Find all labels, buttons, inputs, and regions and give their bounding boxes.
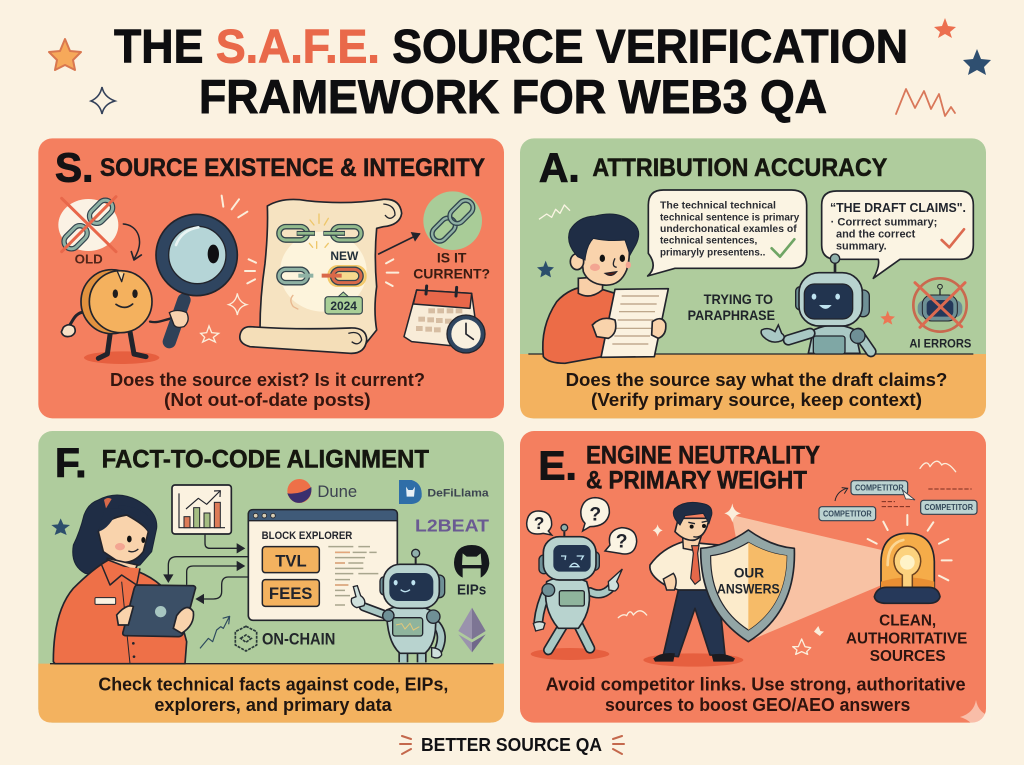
- icon: man with shield: [643, 502, 743, 667]
- caption: S: [110, 369, 425, 410]
- icon: calendar and clock: [404, 286, 485, 353]
- icons: question bubbles: ?: [534, 513, 544, 533]
- heading: E: ENGINE NEUTRALITY: [586, 441, 820, 469]
- heading: E: E.: [538, 442, 577, 488]
- speech bubble: draft claims: summary.: [836, 240, 887, 252]
- caption: E: Avoid competitor links. Use strong, authoritative: [546, 673, 966, 694]
- label: is it current: [413, 250, 490, 282]
- icon: magnifying glass: [156, 214, 237, 342]
- icon: trend scribble: [200, 616, 230, 648]
- icon: person reading: [543, 214, 668, 363]
- label: on-chain: [235, 626, 335, 651]
- label: trying to paraphrase: [688, 292, 775, 323]
- heading: A: [539, 145, 887, 191]
- decorative: scribble and star: [537, 205, 570, 277]
- caption: E: [546, 673, 966, 715]
- label: is it current: CURRENT?: [413, 266, 490, 282]
- arrow: scroll to current: [379, 232, 421, 254]
- caption banner: A: [520, 354, 986, 418]
- icon: block explorer window: TVL: [275, 551, 307, 570]
- icon: orange star: [49, 39, 81, 70]
- icon: shield: OUR: [734, 566, 764, 581]
- speech bubble: technical sentence: The technical technical: [660, 201, 776, 212]
- label: clean authoritative sources: AUTHORITATIVE: [846, 630, 967, 647]
- footer label: BETTER SOURCE QA: [421, 735, 602, 755]
- heading: A: ATTRIBUTION ACCURACY: [592, 154, 887, 182]
- icon: shield: [701, 530, 794, 642]
- icon: Dune logo: Dune: [317, 482, 357, 501]
- icons: question bubbles: ?: [616, 532, 628, 553]
- icon: old broken link: [58, 197, 118, 266]
- caption: E: sources to boost GEO/AEO answers: [605, 694, 910, 715]
- caption banner: A: Does the source say what the draft claims?: [566, 369, 947, 390]
- panel: S source existence: [38, 138, 504, 418]
- arrow: old to coin: [123, 224, 141, 260]
- icon: robot: [761, 254, 871, 354]
- icon: AI errors: AI ERRORS: [909, 336, 971, 350]
- panel: E engine neutrality: [520, 431, 986, 723]
- icons: question bubbles: [527, 498, 637, 554]
- speech bubble: draft claims: “THE DRAFT CLAIMS".: [830, 200, 966, 215]
- decorative sparks: magnifier: [201, 196, 256, 342]
- icons: competitor tags: COMPETITOR: [924, 503, 973, 512]
- icon: Dune logo: [287, 479, 357, 503]
- icon: block explorer window: FEES: [269, 584, 312, 603]
- decorative: coral star: [880, 311, 895, 325]
- heading: E: & PRIMARY WEIGHT: [586, 466, 807, 494]
- icons: competitor tags: [819, 481, 977, 521]
- icon: corner sparkle: [960, 700, 992, 734]
- icon: GitHub EIPs: EIPs: [457, 583, 486, 599]
- icon: shield: ANSWERS: [717, 581, 780, 596]
- icon: chart card: [172, 485, 231, 534]
- icon: parchment scroll: NEW: [330, 249, 359, 263]
- decorative: navy star: [51, 518, 70, 535]
- heading: S: [55, 145, 485, 191]
- icon: coral star: [934, 18, 956, 38]
- icons: competitor tags: COMPETITOR: [823, 509, 872, 518]
- icon: old broken link: OLD: [75, 251, 103, 266]
- speech bubble: technical sentence: [648, 190, 807, 276]
- label: clean authoritative sources: CLEAN,: [879, 612, 936, 629]
- panel: A attribution accuracy: [520, 138, 986, 418]
- label: is it current: IS IT: [437, 250, 467, 266]
- heading: F: FACT-TO-CODE ALIGNMENT: [102, 446, 429, 474]
- caption banner: F: explorers, and primary data: [154, 694, 392, 715]
- heading: S: SOURCE EXISTENCE & INTEGRITY: [100, 154, 485, 182]
- icon: Ethereum diamond: [458, 608, 486, 652]
- caption: S: (Not out-of-date posts): [164, 389, 371, 410]
- icon: L2BEAT logo: L2BEAT: [415, 516, 489, 536]
- caption: S: Does the source exist? Is it current?: [110, 369, 425, 390]
- icon: parchment scroll: [240, 199, 402, 353]
- heading: F: F.: [55, 440, 87, 486]
- speech bubble: technical sentence: underchonatical examles of: [660, 224, 797, 235]
- decorative sparks: scroll: [386, 259, 398, 286]
- speech bubble: draft claims: · Corrrect summary;: [831, 217, 937, 229]
- speech bubble: draft claims: [822, 191, 973, 278]
- icon: woman with tablet: [53, 495, 196, 664]
- icons: question bubbles: ?: [589, 505, 601, 526]
- panel: F fact-to-code alignment: [38, 431, 504, 723]
- speech bubble: technical sentence: technical sentence is primary: [660, 212, 800, 223]
- caption banner: F: Check technical facts against code, EIPs,: [98, 673, 448, 694]
- label: clean authoritative sources: SOURCES: [870, 648, 946, 665]
- title: FRAMEWORK FOR WEB3 QA: [199, 70, 827, 123]
- heading: S: S.: [55, 145, 93, 191]
- speech bubble: technical sentence: primaryly presentens..: [660, 247, 765, 258]
- icon: robot pointing: [351, 549, 445, 662]
- icon: block explorer window: BLOCK EXPLORER: [262, 530, 352, 542]
- icon: AI errors: [909, 278, 971, 350]
- arrows: flows between chart, explorer and tablet: [164, 535, 248, 603]
- title: [114, 20, 908, 123]
- label: trying to paraphrase: PARAPHRASE: [688, 308, 775, 323]
- caption banner: F: [38, 664, 504, 723]
- icon: GitHub EIPs: [454, 545, 489, 599]
- heading: F: [55, 440, 429, 486]
- icon: outline sparkle: [91, 87, 115, 114]
- decorative: squiggles and stars: [618, 461, 956, 654]
- icon: parchment scroll: 2024: [330, 299, 357, 313]
- icon: coin character: [61, 270, 172, 364]
- heading: A: A.: [539, 145, 580, 191]
- icon: navy star: [963, 49, 991, 75]
- caption banner: A: (Verify primary source, keep context): [591, 389, 922, 410]
- icon: DefiLlama logo: DeFiLlama: [427, 487, 490, 499]
- speech bubble: draft claims: and the correct: [836, 229, 916, 241]
- icon: confused robot: [531, 524, 622, 660]
- label: on-chain: ON-CHAIN: [262, 629, 335, 648]
- icon: zigzag scribble: [896, 89, 955, 116]
- icon: DefiLlama logo: [399, 480, 490, 504]
- heading: E: [538, 441, 820, 494]
- label: trying to paraphrase: TRYING TO: [704, 292, 773, 307]
- title: THE S.A.F.E. SOURCE VERIFICATION: [114, 20, 908, 72]
- speech bubble: technical sentence: technical sentences,: [660, 236, 757, 247]
- icons: competitor tags: COMPETITOR: [855, 483, 904, 492]
- light beam: [732, 515, 882, 638]
- icon: alert siren: [868, 515, 952, 603]
- icon: block explorer window: [248, 510, 397, 620]
- icon: current link: [423, 191, 482, 250]
- label: clean authoritative sources: [846, 612, 967, 665]
